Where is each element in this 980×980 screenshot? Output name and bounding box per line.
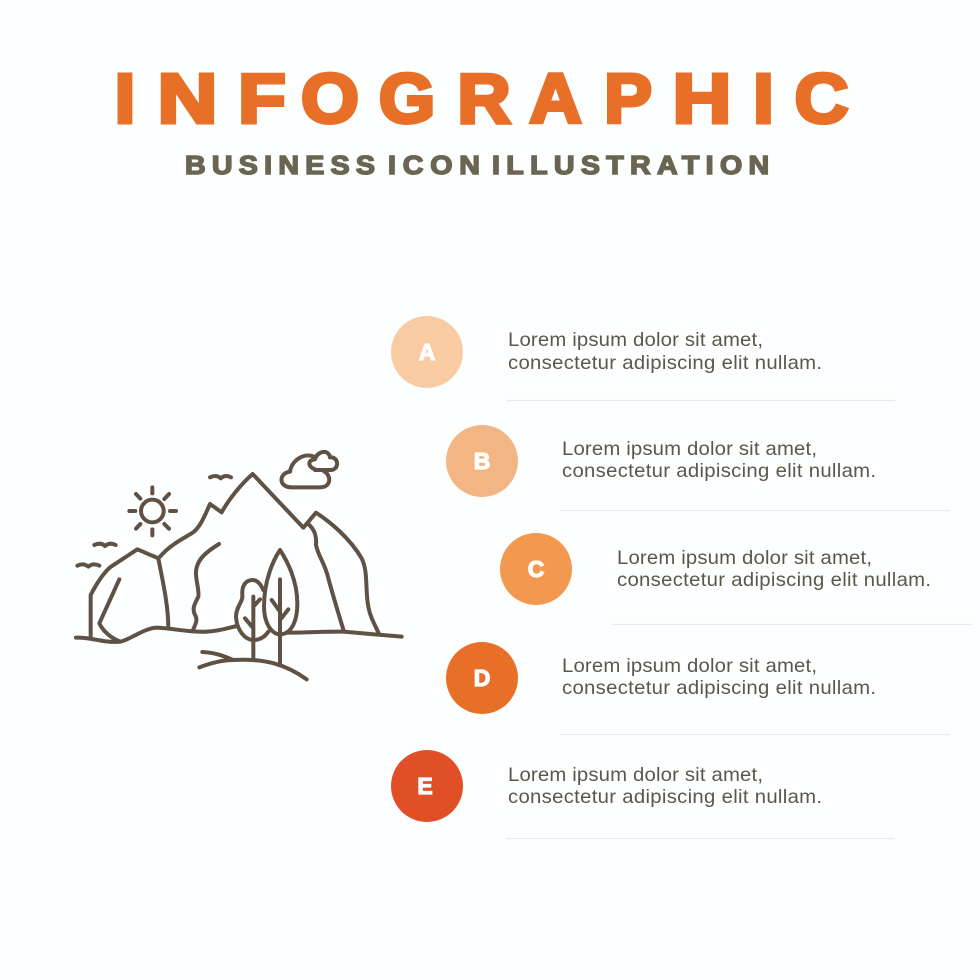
badge D — [446, 642, 518, 714]
text E: consectetur adipiscing elit nullam. — [508, 787, 822, 808]
title: R — [457, 60, 511, 138]
subtitle — [185, 150, 769, 180]
text C: Lorem ipsum dolor sit amet, — [617, 548, 872, 569]
badge E — [391, 750, 463, 822]
subtitle: BUSINESS — [185, 150, 375, 180]
subtitle: ICON — [388, 150, 480, 180]
text B: Lorem ipsum dolor sit amet, — [562, 439, 817, 460]
text B: consectetur adipiscing elit nullam. — [562, 461, 876, 482]
subtitle: ILLUSTRATION — [492, 150, 769, 180]
title: N — [158, 60, 217, 138]
text D — [562, 656, 876, 699]
badge C — [500, 533, 572, 605]
badge E: E — [417, 773, 433, 799]
title: I — [753, 60, 774, 138]
icon part: left rock — [91, 549, 168, 642]
title: O — [301, 60, 359, 138]
icon part: sun — [129, 487, 176, 535]
text A: consectetur adipiscing elit nullam. — [508, 353, 822, 374]
icon part: clouds — [281, 452, 337, 487]
badge B — [446, 425, 518, 497]
badge B: B — [474, 448, 490, 474]
text E — [508, 765, 822, 808]
title: A — [529, 60, 582, 138]
text D: Lorem ipsum dolor sit amet, — [562, 656, 817, 677]
icon part: birds — [77, 476, 231, 567]
text C: consectetur adipiscing elit nullam. — [617, 570, 931, 591]
text C — [617, 548, 931, 591]
badge D: D — [474, 665, 490, 691]
text B — [562, 439, 876, 482]
text A: Lorem ipsum dolor sit amet, — [508, 330, 763, 351]
badge A: A — [419, 339, 435, 365]
text D: consectetur adipiscing elit nullam. — [562, 678, 876, 699]
icon: mountains with trees, sun, cloud and birds — [76, 452, 402, 679]
title: F — [238, 59, 286, 138]
title: C — [795, 60, 848, 138]
title: G — [379, 60, 435, 138]
step B — [446, 425, 876, 497]
title: I — [115, 60, 135, 138]
title: P — [604, 59, 652, 137]
step E — [391, 750, 822, 822]
badge C: C — [528, 556, 544, 582]
badge A — [391, 316, 463, 388]
step C — [500, 533, 931, 605]
title — [115, 59, 848, 138]
title: H — [673, 60, 731, 138]
icon part: ground line — [76, 626, 402, 642]
icon part: small tree — [236, 580, 268, 658]
text E: Lorem ipsum dolor sit amet, — [508, 765, 763, 786]
step D — [446, 642, 876, 714]
icon part: tall tree — [264, 550, 297, 663]
icon part: main mountain — [160, 474, 379, 634]
text A — [508, 330, 822, 374]
icon part: hill — [199, 652, 307, 679]
step A — [391, 316, 822, 388]
